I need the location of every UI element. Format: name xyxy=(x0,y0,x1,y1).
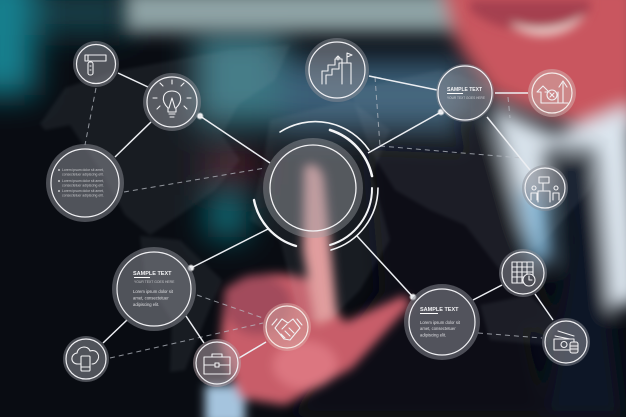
node: sample text top right xyxy=(436,64,494,122)
map: Europe and Africa xyxy=(250,100,390,320)
node: meeting xyxy=(522,165,568,211)
list text xyxy=(58,168,104,198)
map: South America xyxy=(140,236,222,372)
connector end dots xyxy=(188,110,444,300)
solid connectors xyxy=(103,73,553,358)
body text: amet, consectetuer xyxy=(133,296,169,300)
list text: Lorem ipsum dolor sit amet, xyxy=(62,168,104,172)
list text: Lorem ipsum dolor sit amet, xyxy=(62,179,104,183)
node: sample text bottom right xyxy=(404,284,480,360)
icon: growth arrows xyxy=(537,81,568,103)
icon: meeting people xyxy=(531,177,559,202)
central touch node xyxy=(254,122,378,250)
heading: SAMPLE TEXT xyxy=(447,87,482,93)
body text: amet, consectetuer xyxy=(420,326,456,331)
node: briefcase xyxy=(193,339,241,387)
node: stairs to flag xyxy=(305,38,369,102)
icon: briefcase xyxy=(204,354,230,374)
body text: Lorem ipsum dolor sit xyxy=(133,289,174,294)
node: growth chart xyxy=(528,69,576,117)
icon: stairs and flag xyxy=(322,53,352,84)
icon: handshake xyxy=(272,319,302,340)
icon: cash and coins xyxy=(554,331,578,353)
map: Australia xyxy=(480,295,560,345)
body text: adipiscing elit. xyxy=(420,332,446,338)
map: Asia xyxy=(350,70,610,270)
node: light bulb xyxy=(143,73,201,131)
body text: adipiscing elit. xyxy=(133,302,159,307)
world map xyxy=(40,45,610,372)
body text: Lorem ipsum dolor sit xyxy=(420,320,461,325)
node: money xyxy=(542,318,590,366)
node: calendar and clock xyxy=(499,249,547,297)
list text: consectetuer adipiscing elit. xyxy=(62,194,104,198)
icon: USB drive xyxy=(85,55,106,75)
icon: light bulb xyxy=(153,80,191,117)
icon: calendar and clock xyxy=(512,262,535,286)
list text: consectetuer adipiscing elit. xyxy=(62,172,104,176)
node: sample text left xyxy=(112,247,196,331)
list text: Lorem ipsum dolor sit amet, xyxy=(62,189,104,193)
body text xyxy=(420,320,461,338)
icon: cloud and phone xyxy=(72,347,99,371)
heading: SAMPLE TEXT xyxy=(420,307,459,313)
subheading: YOUR TEXT GOES HERE xyxy=(134,280,175,284)
dashed connectors xyxy=(85,77,542,358)
node: USB drive xyxy=(73,41,119,87)
node: cloud and phone xyxy=(63,336,109,382)
node: handshake xyxy=(263,303,311,351)
map: North America xyxy=(40,45,290,235)
body text xyxy=(133,289,174,307)
subheading: YOUR TEXT GOES HERE xyxy=(447,96,485,100)
list text: consectetuer adipiscing elit. xyxy=(62,184,104,188)
heading: SAMPLE TEXT xyxy=(133,271,172,277)
node: bullet list xyxy=(46,144,124,222)
